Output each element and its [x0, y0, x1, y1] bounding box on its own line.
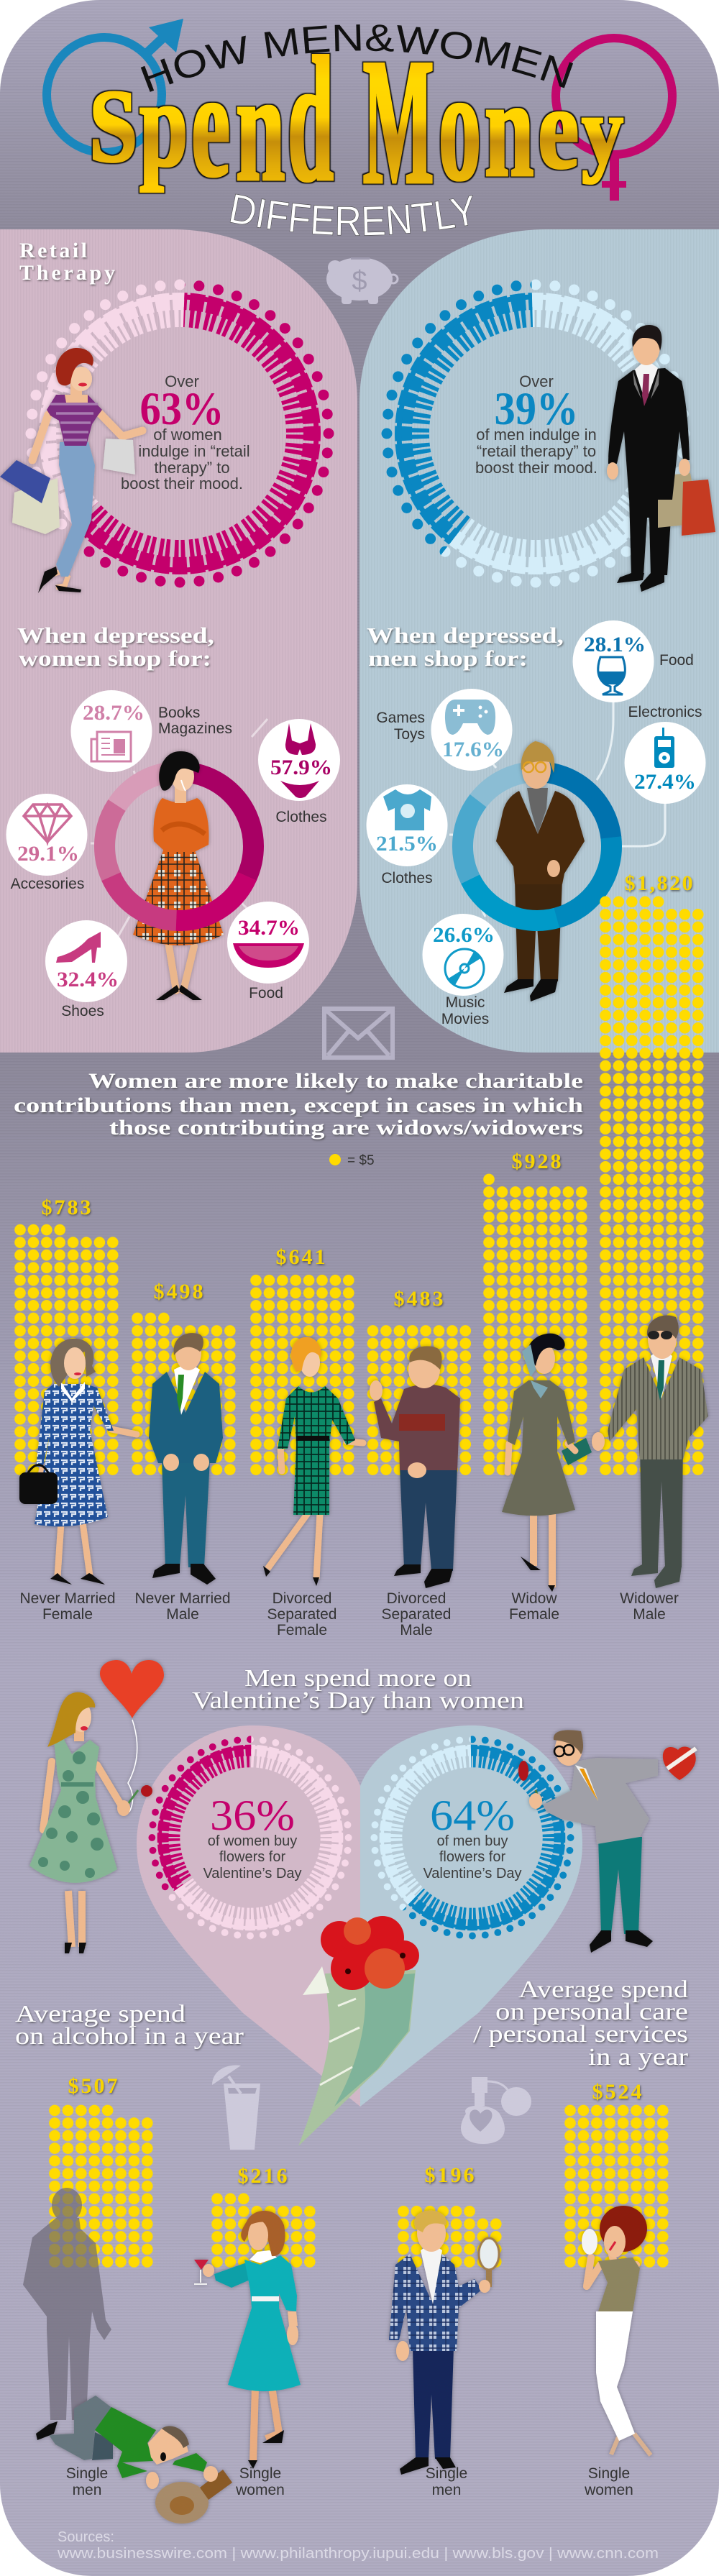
labels: charitable categories: Male — [633, 1606, 666, 1623]
labels: charitable categories — [19, 1590, 679, 1638]
icon: female symbol — [556, 38, 672, 201]
title: spend money — [89, 21, 623, 222]
bubble: shoes: 32.4% — [57, 968, 119, 991]
title: spend money: e — [191, 40, 230, 209]
heading: when depressed women: women shop for: — [19, 646, 211, 671]
heading: when depressed men — [367, 623, 564, 671]
heading: when depressed men: men shop for: — [368, 646, 528, 671]
text: men valentine stat: Valentine’s Day — [423, 1866, 522, 1881]
text: women valentine stat: of women buy — [208, 1833, 297, 1849]
illustration: rose bouquet — [298, 1916, 419, 2146]
text: women retail stat: 63% — [139, 383, 224, 435]
labels: charitable categories: Male — [166, 1606, 199, 1623]
heading: valentine: Men spend more on — [244, 1665, 472, 1692]
labels: single men and women: Single — [66, 2465, 108, 2482]
bubble: books: 28.7% — [83, 701, 145, 725]
heading: valentine — [192, 1665, 524, 1714]
heading: charitable contributions — [14, 1069, 583, 1140]
labels: single men and women: Single — [239, 2465, 281, 2482]
title: spend money: n — [236, 41, 285, 214]
panel: women — [0, 229, 357, 1053]
icon: envelope — [324, 1009, 393, 1058]
value: 928: $928 — [512, 1150, 561, 1173]
icon: perfume bottle — [461, 2077, 531, 2144]
text: women retail stat: boost their mood. — [121, 475, 243, 492]
labels: charitable categories: Female — [277, 1622, 327, 1638]
figure: divorced male — [370, 1346, 460, 1588]
title: spend money: o — [439, 38, 481, 214]
bubble: music — [423, 914, 503, 1027]
text: women valentine stat: flowers for — [219, 1849, 285, 1865]
heading: retail therapy: Therapy — [19, 261, 115, 285]
bubble: food — [227, 902, 309, 1001]
bubble: electronics: 27.4% — [634, 770, 696, 794]
value: 641: $641 — [276, 1245, 325, 1269]
value: 196: $196 — [424, 2163, 475, 2187]
figure: divorced female — [263, 1337, 363, 1586]
text: men retail stat: boost their mood. — [475, 459, 597, 477]
labels: charitable categories: Divorced — [387, 1590, 446, 1607]
labels: single men and women: women — [235, 2482, 285, 2498]
bubble: accessories: 29.1% — [17, 842, 79, 866]
chart: women valentine ring — [152, 1739, 349, 1936]
bubble: men clothes: 21.5% — [376, 832, 438, 856]
chart: widow female dots — [482, 1173, 588, 1476]
figure: brown suit man — [496, 741, 585, 1001]
figure: single woman with cocktail — [194, 2211, 301, 2469]
labels: single men and women: men — [73, 2482, 101, 2498]
bubble: games: 17.6% — [442, 738, 504, 761]
bubble: men clothes — [367, 784, 447, 886]
value: 1820: $1,820 — [624, 871, 693, 895]
heart: men half — [360, 1725, 582, 2107]
labels: single men and women — [66, 2465, 633, 2498]
title: spend money: e — [538, 63, 579, 193]
chart: alcohol women dots — [211, 2193, 316, 2268]
heading: personal care: on personal care — [495, 1999, 688, 2025]
title: spend money: y — [582, 78, 623, 184]
labels: charitable categories: Female — [42, 1606, 93, 1623]
heading: alcohol: Average spend — [15, 2001, 186, 2027]
text: men valentine stat: of men buy — [437, 1833, 508, 1849]
heading: personal care: in a year — [588, 2044, 689, 2071]
labels: charitable categories: Widower — [620, 1590, 679, 1607]
text: men valentine stat: flowers for — [439, 1849, 505, 1865]
chart: personal care men dots — [397, 2205, 503, 2268]
bubble: food: Food — [249, 985, 283, 1001]
bubble: electronics — [624, 704, 706, 804]
figure: man in suit — [607, 325, 715, 592]
icon: cocktail — [212, 2065, 260, 2150]
labels: charitable categories: Female — [509, 1606, 559, 1623]
heading: charitable contributions: Women are more likely to make charitable — [88, 1069, 583, 1093]
heading: valentine: Valentine’s Day than women — [192, 1687, 524, 1714]
text: men retail stat: 39% — [495, 383, 578, 435]
figure: woman shopper — [0, 348, 142, 593]
bubble: shoes: Shoes — [61, 1003, 104, 1019]
bubble: books: Magazines — [158, 720, 232, 737]
sources — [57, 2529, 659, 2562]
chart: women retail therapy ring — [31, 285, 329, 582]
figure: woman with balloon — [29, 1660, 164, 1953]
text: men retail stat: “retail therapy” to — [477, 442, 596, 460]
labels: charitable categories: Divorced — [273, 1590, 331, 1607]
bubble: accessories — [6, 794, 88, 892]
heading: when depressed men: When depressed, — [367, 623, 564, 648]
chart: women donut upper — [76, 743, 282, 949]
heading: retail therapy: Retail — [19, 239, 87, 262]
heart: women half — [137, 1725, 360, 2107]
title: spend money: S — [89, 68, 137, 183]
chart: widower male dots — [599, 896, 705, 1476]
labels: single men and women: Single — [426, 2465, 467, 2482]
bubble: music: 26.6% — [433, 923, 495, 947]
bubble: books: Books — [158, 705, 200, 721]
connectors: men — [449, 701, 665, 917]
bubble: games — [376, 689, 512, 771]
text: men retail stat — [475, 372, 597, 477]
chart: men donut lower — [438, 747, 636, 945]
chart: divorced female dots — [249, 1274, 355, 1476]
connectors: women — [91, 719, 267, 942]
value: 783: $783 — [42, 1196, 91, 1219]
bubble: games: Games — [376, 710, 425, 726]
icon: piggy bank: $ — [352, 266, 367, 296]
text: men valentine stat — [423, 1792, 522, 1881]
legend: dot equals five dollars — [329, 1153, 375, 1168]
chart: men donut upper — [433, 742, 641, 950]
value: 216: $216 — [237, 2164, 288, 2188]
figure: widower male — [592, 1315, 708, 1588]
bubble: food: 34.7% — [238, 916, 300, 940]
bubble: games: Toys — [394, 726, 425, 743]
bubble: electronics: Electronics — [628, 704, 702, 720]
labels: charitable categories: Male — [400, 1622, 433, 1638]
figure: single man with mirror — [389, 2210, 499, 2475]
heading: when depressed women: When depressed, — [17, 623, 214, 648]
labels: single men and women: women — [584, 2482, 633, 2498]
bubble: accessories: Accesories — [11, 876, 84, 892]
title: how men and women: HOW MEN&WOMEN — [141, 24, 573, 92]
bubble: shoes — [45, 920, 127, 1019]
text: men retail stat: of men indulge in — [476, 426, 597, 444]
chart: men valentine ring — [374, 1739, 571, 1936]
labels: charitable categories: Never Married — [19, 1590, 116, 1607]
heading: when depressed women — [17, 623, 214, 671]
labels: charitable categories: Separated — [382, 1606, 451, 1623]
figure: never married male — [149, 1333, 223, 1585]
chart: women donut lower — [81, 748, 278, 945]
value: 498: $498 — [154, 1280, 203, 1303]
legend: dot equals five dollars: = $5 — [347, 1153, 375, 1168]
value: 483: $483 — [394, 1287, 443, 1311]
chart: personal care women dots — [564, 2104, 669, 2268]
bubble: clothes: Clothes — [275, 809, 327, 825]
heading: charitable contributions: contributions than men, except in cases in which — [14, 1094, 583, 1117]
text: men valentine stat: 64% — [430, 1792, 515, 1839]
text: men retail stat: Over — [519, 372, 554, 390]
value: 507: $507 — [68, 2074, 118, 2098]
text: women retail stat: therapy” to — [154, 459, 230, 477]
chart: never married female dots — [14, 1224, 119, 1476]
icon: male symbol — [47, 19, 183, 152]
chart: men retail therapy ring — [387, 285, 684, 582]
labels: charitable categories: Separated — [267, 1606, 336, 1623]
figure: crying woman — [133, 751, 224, 1000]
heading: alcohol — [15, 2001, 244, 2050]
text: women valentine stat: 36% — [210, 1792, 295, 1839]
text: women retail stat: indulge in “retail — [138, 442, 250, 460]
heading: personal care — [473, 1976, 689, 2071]
figure: drunk man — [36, 2396, 232, 2524]
heading: alcohol: on alcohol in a year — [15, 2023, 244, 2050]
chart: divorced male dots — [366, 1324, 472, 1476]
text: women valentine stat: Valentine’s Day — [203, 1866, 302, 1881]
heading: charitable contributions: those contributing are widows/widowers — [109, 1116, 583, 1140]
panel: men — [360, 229, 719, 1053]
chart: alcohol men dots — [48, 2104, 154, 2268]
labels: single men and women: Single — [588, 2465, 630, 2482]
bubble: men clothes: Clothes — [381, 870, 433, 886]
heading: personal care: / personal services — [473, 2021, 688, 2048]
figure: widow female — [502, 1334, 592, 1592]
figure: shadow of single man — [23, 2188, 111, 2420]
bubble: clothes — [258, 719, 340, 825]
text: women valentine stat — [203, 1792, 302, 1881]
figure: single woman with compact — [582, 2206, 651, 2455]
text: women retail stat: of women — [153, 426, 222, 444]
sources: Sources: — [58, 2529, 114, 2545]
bubble: books — [70, 690, 232, 772]
bubble: clothes: 57.9% — [270, 756, 332, 779]
heading: personal care: Average spend — [518, 1976, 688, 2003]
figure: man with heart box — [518, 1730, 696, 1953]
chart: never married male dots — [131, 1312, 237, 1476]
text: women retail stat — [121, 372, 250, 492]
bubble: music: Movies — [441, 1011, 489, 1027]
sources: www.businesswire.com | www.philanthropy.iupui.edu | www.bls.gov | www.cnn.com — [57, 2546, 659, 2562]
bubble: men food — [572, 620, 694, 702]
labels: single men and women: men — [432, 2482, 461, 2498]
bubble: music: Music — [446, 994, 485, 1011]
title: spend money: n — [485, 50, 533, 206]
title: spend money: d — [288, 21, 334, 219]
text: women retail stat: Over — [165, 372, 199, 390]
bubble: men food: 28.1% — [584, 633, 646, 656]
heading: retail therapy — [19, 239, 115, 285]
icon: piggy bank — [326, 257, 398, 304]
bubble: men food: Food — [659, 652, 694, 669]
figure: never married female — [19, 1339, 137, 1585]
title: spend money: M — [363, 21, 434, 222]
title: spend money: p — [139, 55, 188, 193]
labels: charitable categories: Widow — [511, 1590, 557, 1607]
labels: charitable categories: Never Married — [134, 1590, 231, 1607]
value: 524: $524 — [592, 2080, 641, 2104]
title: differently: DIFFERENTLY — [230, 194, 473, 236]
